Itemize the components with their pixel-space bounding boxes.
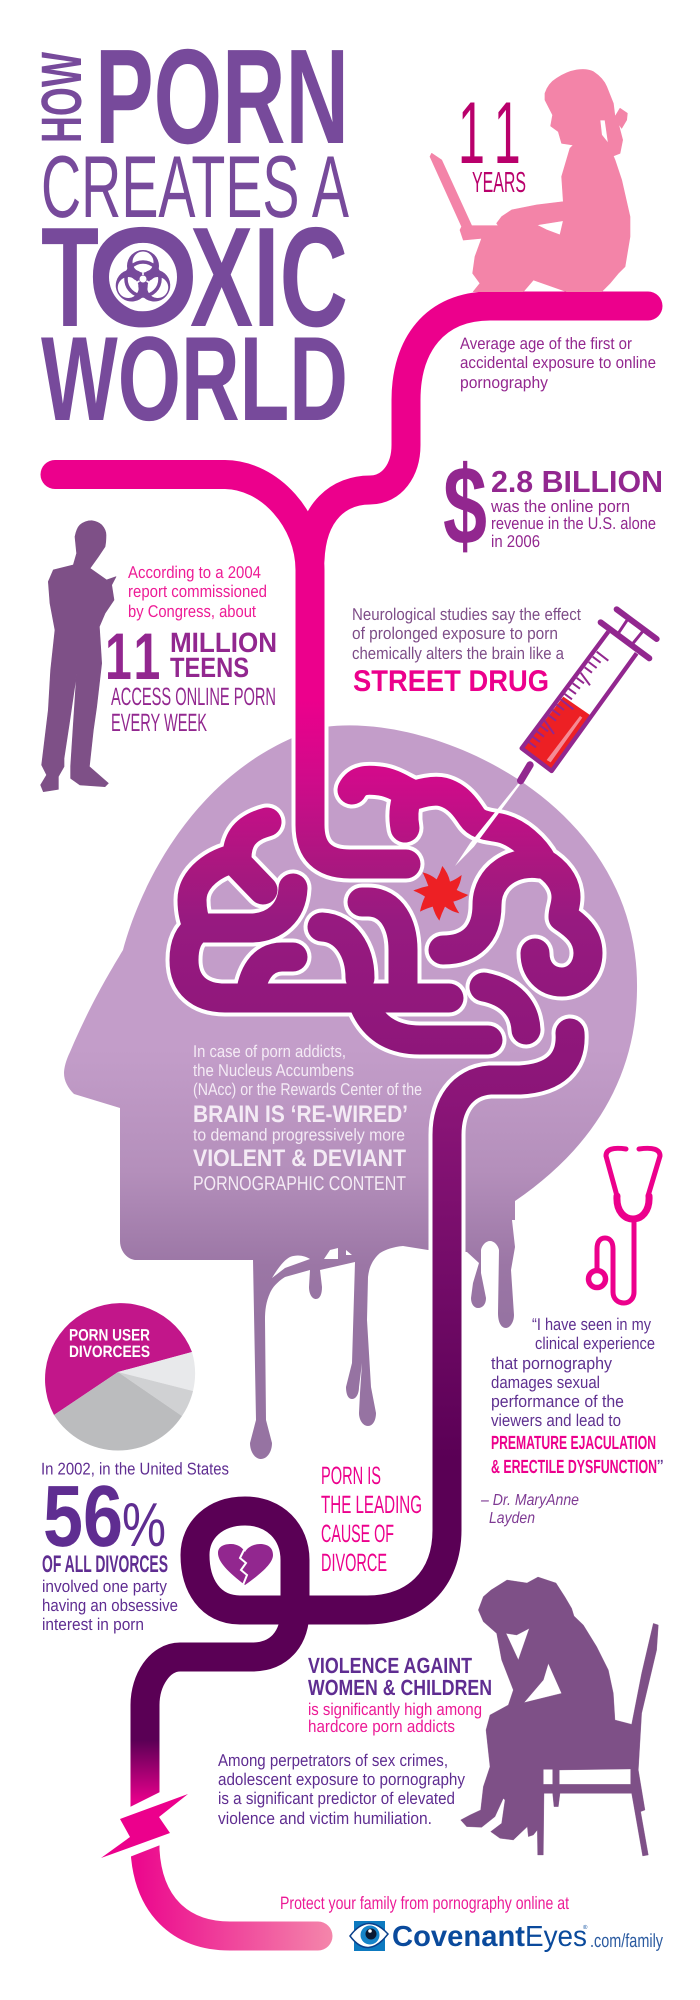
title word: toxic: O	[87, 198, 199, 357]
text: rewired brain: BRAIN IS ‘RE-WIRED’	[193, 1101, 408, 1128]
text: leading cause of divorce: PORN IS	[321, 1462, 381, 1490]
pie label: DIVORCEES	[69, 1343, 150, 1361]
label: years: YEARS	[472, 167, 526, 199]
title word: world: WORLD	[41, 312, 348, 446]
text: leading cause of divorce	[321, 1462, 422, 1577]
stat: 56 percent of divorces: involved one party	[42, 1577, 167, 1596]
text: doctor quote: performance of the	[491, 1392, 624, 1411]
quote attribution: – Dr. MaryAnne	[480, 1492, 579, 1509]
logo: covenant eyes: Eyes	[525, 1921, 587, 1953]
brain: bottom right fold	[484, 987, 526, 1030]
logo icon: eye	[350, 1921, 388, 1951]
number: 11: 11	[458, 83, 521, 182]
text: doctor quote: “I have seen in my	[532, 1315, 651, 1334]
number block: ACCESS ONLINE PORN	[111, 683, 276, 711]
logo: covenant eyes	[350, 1921, 663, 1953]
title	[30, 21, 349, 446]
icon: biohazard	[110, 250, 176, 307]
number block: 11	[105, 619, 160, 693]
pipe: left branch and trunk into the brain	[55, 474, 406, 864]
pie label: PORN USER	[69, 1326, 150, 1344]
icon: girl with laptop	[430, 69, 630, 292]
logo: covenant eyes: ®	[583, 1924, 588, 1931]
title word: toxic: T	[41, 198, 99, 357]
text: perpetrators: is a significant predictor of elevated	[218, 1789, 455, 1808]
title word: toxic: XIC	[190, 198, 348, 357]
text: violence against women and children: is significantly high among	[308, 1700, 482, 1719]
number block: MILLION	[170, 627, 277, 658]
text: neurological studies: of prolonged exposure to porn	[352, 624, 558, 643]
pie label	[69, 1326, 150, 1361]
text: congress report	[128, 563, 267, 621]
icon: red burst in brain	[413, 866, 468, 921]
stat: 56 percent of divorces: %	[122, 1491, 166, 1560]
text: doctor quote: ”	[657, 1457, 663, 1478]
title line: creates a: CREATES A	[41, 137, 349, 236]
text: neurological studies: Neurological studies say the effect	[352, 605, 581, 624]
text: perpetrators: Among perpetrators of sex crimes,	[218, 1751, 448, 1770]
stat: 2.8 billion	[443, 443, 663, 568]
brain: inner right fold	[443, 863, 540, 950]
brain: top and right lobe	[352, 780, 588, 982]
icon: stethoscope	[588, 1148, 660, 1303]
stat: 2.8 billion: in 2006	[491, 532, 540, 551]
syringe needle	[455, 783, 520, 866]
stat: 56 percent of divorces: having an obsessive	[42, 1596, 178, 1615]
head silhouette with drips	[64, 725, 637, 1459]
text: congress report: According to a 2004	[128, 563, 261, 582]
text: rewired brain: the Nucleus Accumbens	[193, 1061, 354, 1080]
brain: middle left fold	[198, 888, 293, 928]
icon: lightning break	[101, 1788, 188, 1860]
title word: porn: PORN	[95, 21, 349, 172]
text: rewired brain: VIOLENT & DEVIANT	[193, 1145, 406, 1172]
brain: small top fold	[404, 797, 407, 828]
text: neurological studies: chemically alters the brain like a	[352, 644, 564, 663]
quote attribution: Layden	[489, 1510, 535, 1527]
text: leading cause of divorce: CAUSE OF	[321, 1520, 394, 1548]
icon: dollar sign: $	[443, 443, 487, 568]
number block: EVERY WEEK	[111, 709, 207, 737]
brain: centre fold	[322, 927, 360, 978]
number block: TEENS	[170, 652, 249, 683]
text: neurological studies: STREET DRUG	[353, 665, 549, 698]
text: congress report: by Congress, about	[128, 602, 256, 621]
text: average age: pornography	[460, 374, 549, 392]
brain: bottom fold	[362, 1000, 488, 1040]
text: violence against women and children: VIOLENCE AGAINT	[308, 1653, 472, 1678]
text: rewired brain: (NAcc) or the Rewards Center of the	[193, 1080, 422, 1099]
quote attribution	[480, 1492, 579, 1527]
syringe liquid	[523, 697, 590, 769]
stat: 2.8 billion: revenue in the U.S. alone	[491, 514, 656, 533]
pipe: top branch under the girl	[310, 306, 648, 560]
text: violence against women and children	[308, 1653, 492, 1736]
text: doctor quote: that pornography	[491, 1354, 612, 1373]
text: violence against women and children: hardcore porn addicts	[308, 1717, 455, 1736]
text: rewired brain	[193, 1042, 422, 1195]
stat: 56 percent of divorces: 56	[43, 1468, 123, 1565]
stat: 56 percent of divorces: OF ALL DIVORCES	[42, 1551, 168, 1578]
stat: 56 percent of divorces	[41, 1460, 229, 1634]
brain: centre right fold	[362, 902, 403, 998]
stat: 56 percent of divorces: In 2002, in the United States	[41, 1460, 229, 1478]
stat: 11 million teens	[105, 563, 277, 737]
text: doctor quote: viewers and lead to	[491, 1411, 621, 1430]
stat: 2.8 billion: was the online porn	[490, 497, 630, 516]
text: average age	[460, 335, 656, 392]
syringe body	[521, 609, 657, 781]
icon: woman on chair	[461, 1577, 658, 1856]
title word: how: HOW	[30, 52, 94, 143]
text: perpetrators: adolescent exposure to pornography	[218, 1770, 465, 1789]
icon: broken heart	[218, 1544, 273, 1585]
title word: toxic	[41, 198, 348, 357]
brain: lower left fold	[250, 957, 293, 998]
brain: left lobe	[184, 822, 449, 998]
logo: covenant eyes: Covenant	[392, 1921, 525, 1953]
icon: teen silhouette	[41, 521, 116, 792]
text: congress report: report commissioned	[128, 582, 267, 601]
text: rewired brain: In case of porn addicts,	[193, 1042, 346, 1061]
text: neurological studies	[352, 605, 581, 698]
text: doctor quote	[480, 1315, 663, 1527]
pipe: main tube through the page	[55, 306, 648, 1830]
stat: 2.8 billion: 2.8 BILLION	[491, 465, 663, 499]
stat: 56 percent of divorces: interest in porn	[42, 1615, 144, 1634]
brain: left fold stub	[237, 863, 263, 890]
text: protect your family: Protect your family from pornography online at	[280, 1893, 569, 1913]
text: violence against women and children: WOMEN & CHILDREN	[308, 1675, 492, 1700]
text: rewired brain: PORNOGRAPHIC CONTENT	[193, 1173, 406, 1195]
pipe: exit from brain, loop around heart, down to lightning	[145, 1033, 570, 1830]
text: average age: accidental exposure to online	[460, 354, 656, 372]
pipe: bottom tail	[145, 1840, 318, 1936]
icon: syringe	[455, 609, 657, 866]
number block	[105, 619, 277, 737]
text: leading cause of divorce: DIVORCE	[321, 1549, 387, 1577]
text: perpetrators	[218, 1751, 465, 1828]
text: rewired brain: to demand progressively more	[193, 1126, 405, 1144]
stat: 11 years	[458, 83, 526, 199]
text: perpetrators: violence and victim humiliation.	[218, 1809, 432, 1828]
text: average age: Average age of the first or	[460, 335, 632, 353]
text: doctor quote: clinical experience	[535, 1334, 655, 1353]
logo: covenant eyes: .com/family	[590, 1931, 663, 1952]
pie chart	[45, 1303, 195, 1451]
pipe casing	[184, 600, 588, 1300]
text: leading cause of divorce: THE LEADING	[321, 1491, 422, 1519]
text: doctor quote: damages sexual	[491, 1373, 600, 1392]
